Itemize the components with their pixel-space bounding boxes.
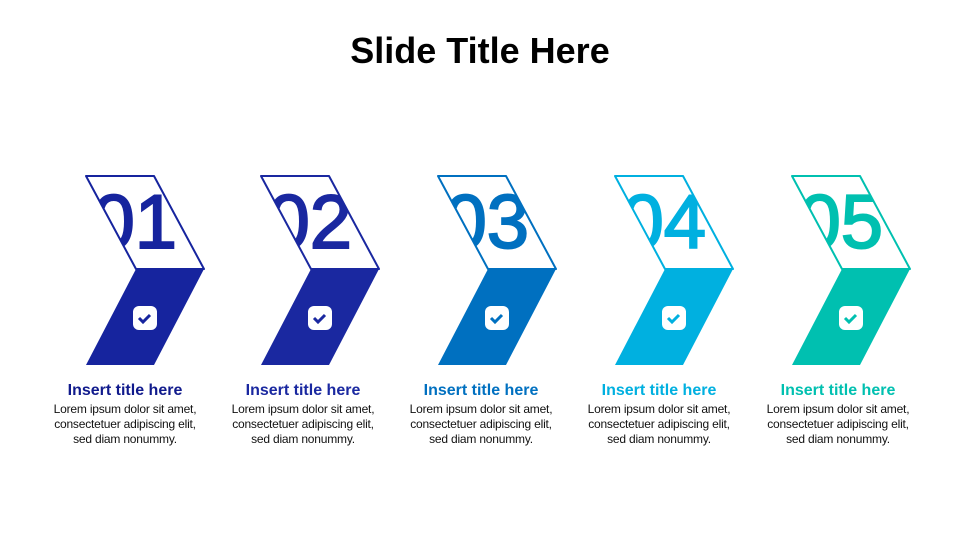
caption 1: Insert title here (68, 382, 182, 399)
chevron 4 (615, 176, 733, 365)
chevron 1 (86, 176, 204, 365)
caption 4: Insert title here (602, 382, 716, 399)
chevron 2: 02 (267, 180, 352, 265)
caption 3: Lorem ipsum dolor sit amet, consectetuer adipiscing elit, sed diam nonummy. (410, 402, 552, 446)
caption 1 (54, 382, 196, 446)
caption 2: Insert title here (246, 382, 360, 399)
chevron 2 (261, 176, 379, 365)
chevron 3: 03 (444, 180, 529, 265)
caption 4 (588, 382, 730, 446)
caption 2 (232, 382, 374, 446)
caption 5 (767, 382, 909, 446)
caption 5: Insert title here (781, 382, 895, 399)
chevron 4: 04 (621, 180, 706, 265)
caption 1: Lorem ipsum dolor sit amet, consectetuer adipiscing elit, sed diam nonummy. (54, 402, 196, 446)
chevrons (85, 175, 911, 365)
chevron 3 (438, 176, 556, 365)
chevron 5 (792, 176, 910, 365)
chevron 1: 01 (92, 180, 177, 265)
caption 5: Lorem ipsum dolor sit amet, consectetuer adipiscing elit, sed diam nonummy. (767, 402, 909, 446)
caption 2: Lorem ipsum dolor sit amet, consectetuer adipiscing elit, sed diam nonummy. (232, 402, 374, 446)
caption 3 (410, 382, 552, 446)
title: Slide Title Here (350, 30, 610, 71)
chevron 5: 05 (798, 180, 883, 265)
caption 4: Lorem ipsum dolor sit amet, consectetuer adipiscing elit, sed diam nonummy. (588, 402, 730, 446)
caption 3: Insert title here (424, 382, 538, 399)
